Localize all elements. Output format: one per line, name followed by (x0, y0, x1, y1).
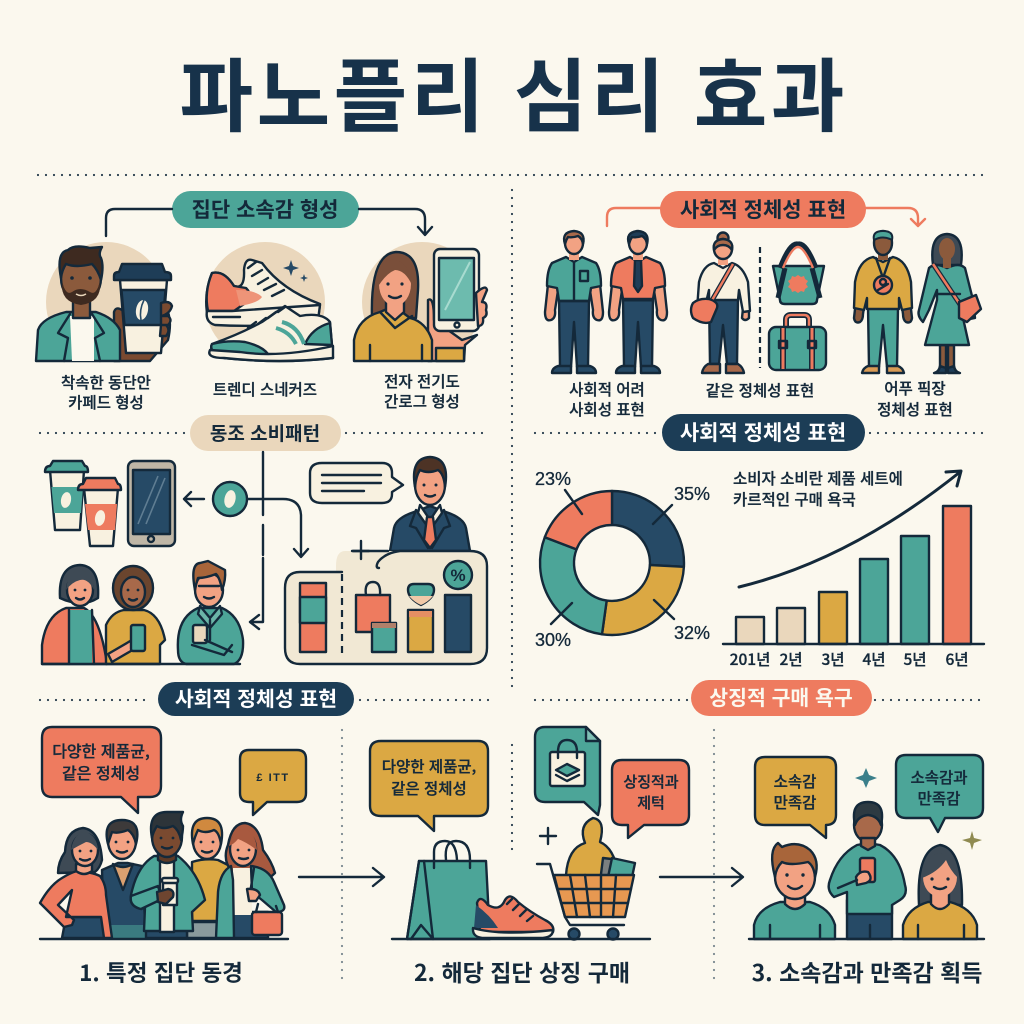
icon: man in coral shirt (609, 231, 667, 373)
icon: navy column (445, 595, 471, 652)
chart: stacked column (300, 583, 326, 652)
callout: mustard speech bubble: 같은 정체성 (391, 777, 467, 799)
arrow: step 1 to 2 (299, 868, 384, 886)
heading: group belonging (172, 191, 359, 228)
heading: symbolic purchase desire: 상징적 구매 욕구 (709, 681, 853, 711)
callout: teal speech bubble: 소속감과 (910, 766, 968, 788)
icon: three satisfied people (749, 802, 984, 939)
callout: mustard speech bubble: £ ITT (256, 772, 290, 784)
label: left figures caption: 사회성 표현 (569, 398, 645, 420)
label: step 2: 2. 해당 집단 상징 구매 (414, 954, 630, 988)
label: step 3: 3. 소속감과 만족감 획득 (752, 954, 982, 988)
icon: suitcase (769, 315, 826, 370)
label: smartphone caption (384, 370, 460, 412)
heading: social identity (660, 191, 866, 228)
panel: step 2 (370, 727, 743, 988)
label: sneakers caption: 트렌디 스네커즈 (213, 378, 317, 400)
text: chart caption: 소비자 소비란 제품 세트에 (733, 467, 903, 489)
icon: woman in teal dress (918, 234, 981, 373)
icon: figure with shopping cart (392, 818, 650, 940)
label: smartphone caption: 간로그 형성 (384, 390, 460, 412)
heading: conformity consumption: 동조 소비패턴 (210, 419, 320, 446)
icon: plus mark (540, 828, 556, 844)
icon: coffee cups (45, 461, 121, 546)
label: donut percentages: 35% (674, 484, 710, 504)
chart: bar chart: 201년 (730, 648, 770, 670)
panel: step 1 (40, 682, 384, 988)
panel: social identity figures (545, 191, 981, 420)
heading: social identity: 사회적 정체성 표현 (680, 194, 846, 224)
icon: sparkle (855, 768, 877, 788)
icon: trendy sneakers (205, 242, 333, 362)
label: donut percentages (535, 469, 710, 650)
label: right figures caption: 정체성 표현 (877, 398, 953, 420)
callout: coral speech bubble: 같은 정체성 (62, 760, 140, 784)
icon: coral sneaker (473, 896, 553, 938)
label: donut percentages: 23% (535, 469, 571, 489)
icon: smartphone (128, 461, 175, 546)
chart: donut (535, 469, 710, 650)
panel: conformity consumption (42, 415, 487, 664)
label: coffee caption: 착속한 동단안 (61, 371, 151, 393)
label: coffee caption (61, 371, 151, 413)
callout: coral speech bubble: 제턱 (637, 792, 665, 813)
callout: mustard speech bubble: 소속감 (774, 770, 816, 792)
callout: mustard speech bubble (755, 757, 836, 838)
heading: social identity navy: 사회적 정체성 표현 (680, 417, 846, 447)
panel: product comparison board (285, 541, 487, 664)
chart: bar chart (723, 506, 984, 670)
chart: bar chart: 5년 (903, 648, 927, 670)
label: donut percentages: 30% (535, 630, 571, 650)
label: step 1: 1. 특정 집단 동경 (79, 956, 243, 988)
callout: coral speech bubble: 상징적과 (623, 771, 679, 792)
arrow: social identity connector (607, 208, 925, 226)
icon: percent badge (444, 561, 472, 589)
icon: tote bag (773, 244, 824, 304)
arrow: step 2 to 3 (660, 868, 743, 886)
heading: step section: 사회적 정체성 표현 (175, 682, 337, 712)
label: donut percentages: 32% (674, 623, 710, 643)
label: right figures caption: 어푸 픽장 (884, 377, 946, 399)
callout: mustard speech bubble: 만족감 (774, 791, 816, 813)
icon: product document bubble (535, 727, 600, 815)
callout: teal speech bubble: 만족감 (918, 787, 960, 809)
chart: bar chart: 3년 (821, 648, 845, 670)
label: left figures caption (569, 378, 645, 420)
arrow: conformity connector lines (184, 452, 308, 629)
icon: shopping bags (356, 582, 396, 652)
icon: man with coffee cup (36, 242, 172, 362)
icon: mustard column (408, 584, 434, 652)
callout: coral speech bubble (612, 760, 689, 838)
icon: coffee bean badge (213, 482, 247, 516)
callout: coral speech bubble (42, 727, 161, 813)
icon: group of five people (40, 812, 288, 939)
chart: bar chart: 4년 (862, 648, 886, 670)
heading: conformity consumption (190, 415, 341, 451)
arrow: rising trend (739, 471, 961, 587)
label: left figures caption: 사회적 어려 (569, 378, 645, 400)
panel: group belonging (36, 191, 487, 413)
icon: man in suit (390, 457, 470, 551)
heading: symbolic purchase desire (691, 680, 872, 716)
text: chart caption (733, 467, 903, 510)
title: 파노플리 심리 효과 (180, 33, 844, 149)
chart: bar chart: 6년 (945, 648, 969, 670)
callout: speech bubble (310, 463, 403, 503)
icon: sparkle (962, 831, 982, 850)
heading: social identity navy (662, 414, 865, 451)
icon: man in teal shirt (545, 231, 603, 373)
callout: mustard speech bubble (240, 750, 306, 815)
icon: woman with smartphone (354, 242, 487, 362)
callout: mustard speech bubble (370, 741, 488, 831)
chart: bar chart: 2년 (779, 648, 803, 670)
callout: teal speech bubble (896, 755, 983, 832)
icon: man with pendant (854, 231, 912, 373)
text: chart caption: 카르적인 구매 욕국 (733, 488, 856, 510)
label: right figures caption (877, 377, 953, 420)
icon: teal shopping bag (407, 841, 490, 939)
panel: step 3 (691, 680, 984, 988)
label: smartphone caption: 전자 전기도 (384, 370, 460, 392)
callout: coral speech bubble: 다양한 제품균, (52, 738, 150, 762)
arrow: group belonging connector (106, 209, 432, 236)
panel: social identity charts (535, 414, 984, 670)
label: center figures caption: 같은 정체성 표현 (706, 379, 814, 401)
icon: woman with crossbody bag (691, 232, 750, 373)
callout: mustard speech bubble: 다양한 제품균, (382, 755, 476, 777)
heading: group belonging: 집단 소속감 형성 (192, 194, 338, 224)
label: coffee caption: 카페드 형성 (68, 391, 144, 413)
icon: three consumers (42, 561, 243, 664)
icon: percent badge: % (450, 566, 466, 585)
